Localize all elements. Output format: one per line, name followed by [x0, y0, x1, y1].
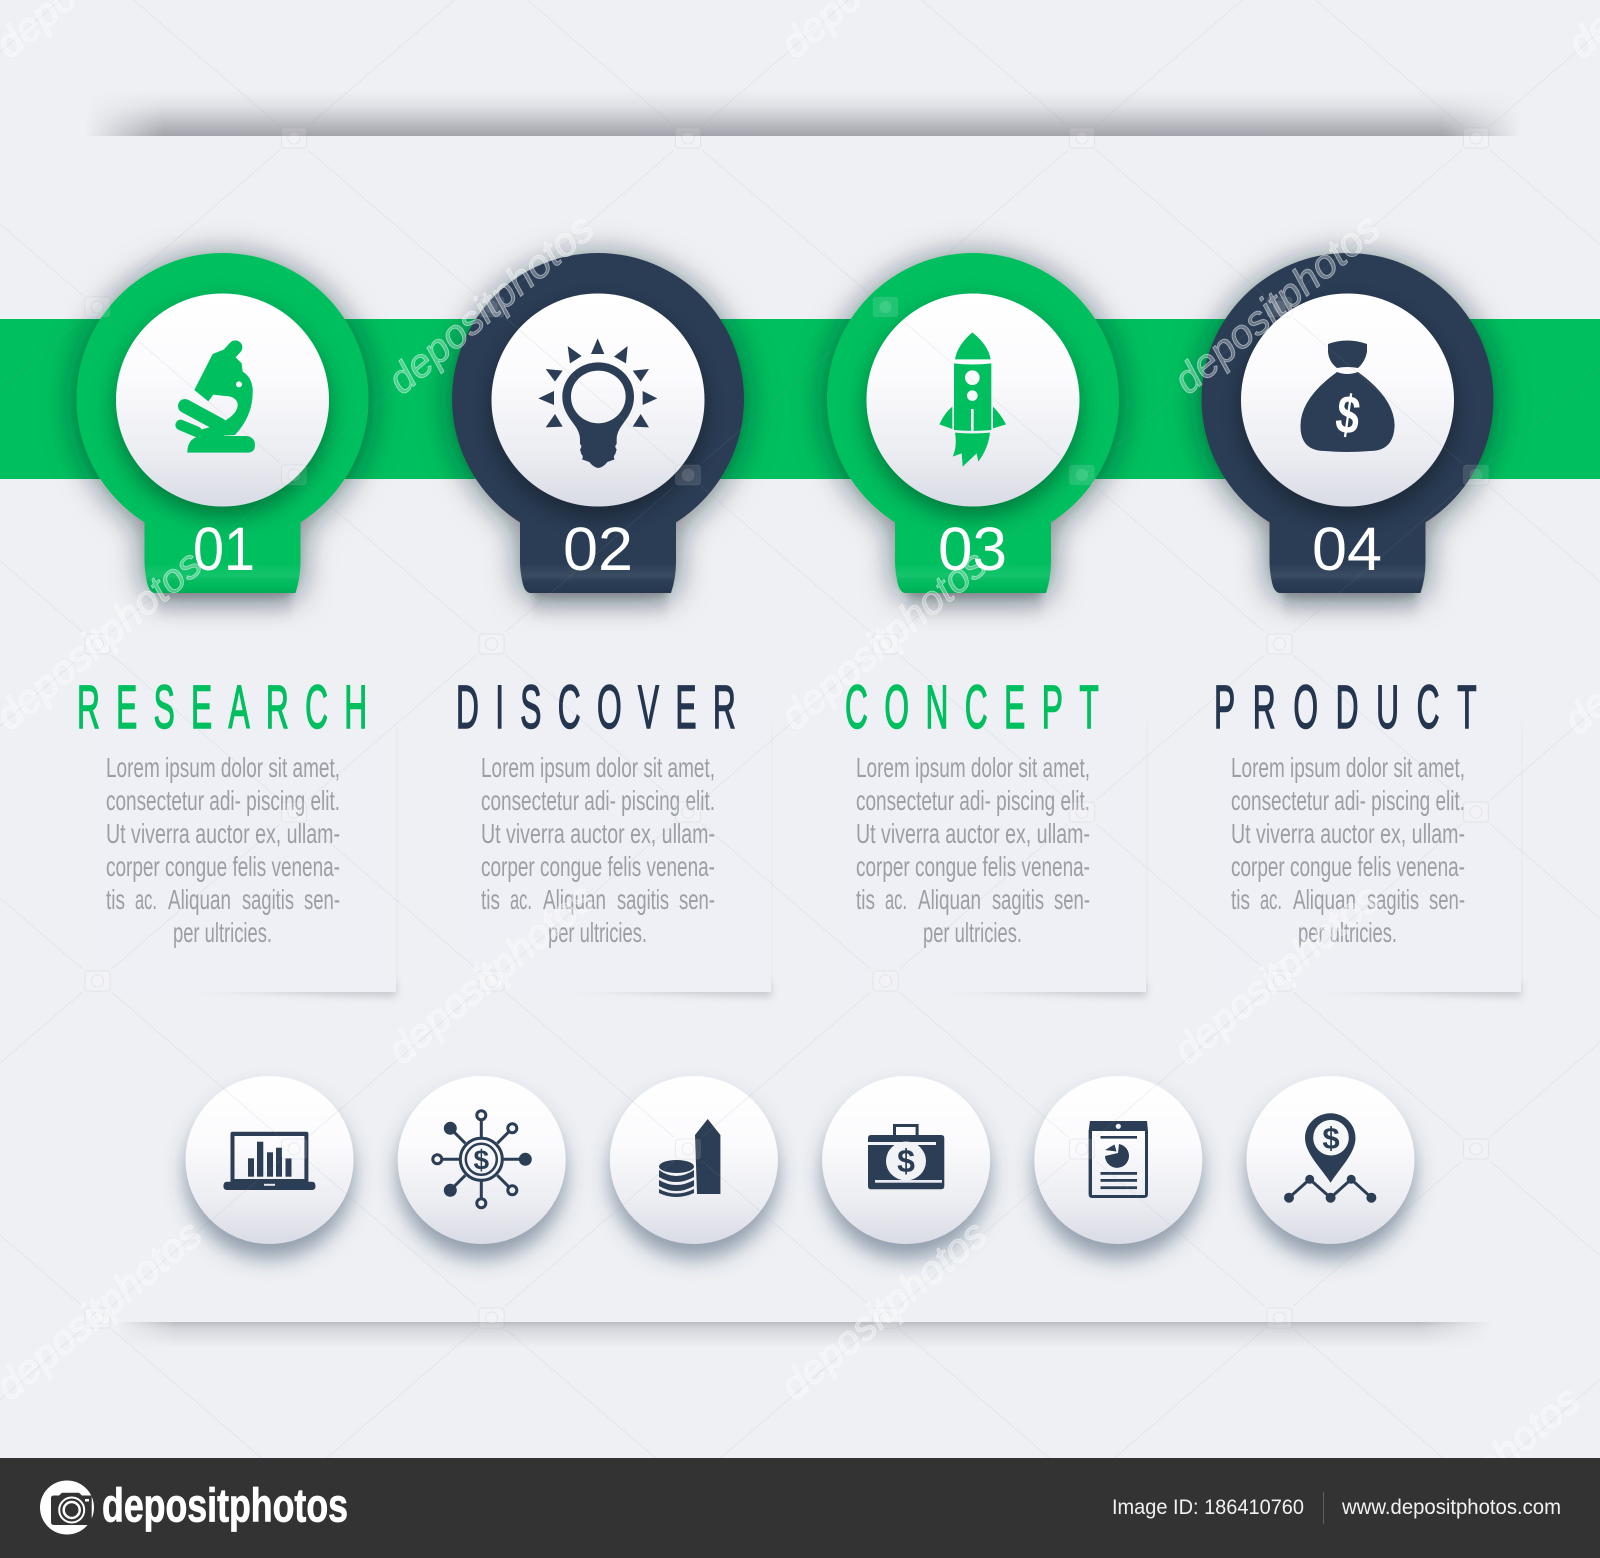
text block: concept: Aliquan [918, 884, 981, 915]
icon: coins and arrow bar [659, 1119, 720, 1197]
text block: product: corper congue felis venena- [1231, 851, 1465, 882]
icon: money briefcase [868, 1124, 944, 1189]
footer: image id: Image ID: 186410760 [1112, 1496, 1304, 1519]
small circle: briefcase [822, 1076, 990, 1244]
shadows below tabs [158, 586, 1417, 624]
text block: product: consectetur adi- piscing elit. [1231, 785, 1465, 816]
watermarks: depositphotos [1166, 206, 1388, 403]
text block: concept: ac. [885, 884, 907, 915]
icon: location pin with line graph: $ [1322, 1120, 1340, 1156]
text block: product: ac. [1260, 884, 1282, 915]
text block: research: consectetur adi- piscing elit. [106, 785, 340, 816]
step 02 badge [452, 253, 744, 593]
text block: research: Ut viverra auctor ex, ullam- [106, 818, 340, 849]
text block: concept: Ut viverra auctor ex, ullam- [856, 818, 1090, 849]
text block: concept: Lorem ipsum dolor sit amet, [856, 752, 1090, 783]
step 01 badge [76, 253, 368, 593]
icon: dollar network: $ [474, 1144, 490, 1175]
text block: discover: sen- [679, 884, 715, 915]
text block: discover: Aliquan [543, 884, 606, 915]
text block: research: ac. [135, 884, 157, 915]
text block: discover: Ut viverra auctor ex, ullam- [481, 818, 715, 849]
text block: concept: tis [856, 884, 875, 915]
top shadow strip [85, 88, 1522, 138]
text block: product: Ut viverra auctor ex, ullam- [1231, 818, 1465, 849]
paper panels behind the text [86, 690, 1522, 997]
small circle: report [1034, 1076, 1202, 1244]
text block: research: Lorem ipsum dolor sit amet, [106, 752, 340, 783]
logo: wordmark: depositphotos [102, 1479, 348, 1532]
number 01: 01 [193, 515, 255, 583]
text block: discover: corper congue felis venena- [481, 851, 715, 882]
watermarks: depositphotos [773, 1212, 995, 1409]
small circle: location [1246, 1076, 1414, 1244]
step 03 badge [827, 253, 1119, 593]
icon: microscope [181, 347, 255, 453]
icon: rocket [939, 332, 1006, 467]
text block: discover: consectetur adi- piscing elit. [481, 785, 715, 816]
text block: discover: per ultricies. [548, 917, 647, 948]
icon: light bulb [538, 338, 657, 468]
text block: concept: corper congue felis venena- [856, 851, 1090, 882]
heading: product: PRODUCT [1214, 674, 1477, 742]
icon: money bag: $ [1332, 384, 1364, 447]
text block: research: sen- [304, 884, 340, 915]
small circle: network [398, 1076, 566, 1244]
heading: concept: CONCEPT [845, 674, 1099, 742]
text block: discover: ac. [510, 884, 532, 915]
logo: depositphotos camera [40, 1480, 94, 1534]
text block: product: sen- [1429, 884, 1465, 915]
icon: money briefcase: $ [897, 1143, 915, 1179]
icon: location pin with line graph [1284, 1113, 1376, 1203]
text block: concept: sagitis [992, 884, 1044, 915]
watermarks: depositphotos [773, 542, 995, 739]
text block: product [1231, 752, 1465, 948]
footer: divider [1323, 1492, 1324, 1524]
heading: discover: DISCOVER [456, 674, 736, 742]
text block: research: tis [106, 884, 125, 915]
small circle: laptop [186, 1076, 354, 1244]
text block: product: per ultricies. [1298, 917, 1397, 948]
heading: research: RESEARCH [77, 674, 367, 742]
text block: concept: sen- [1054, 884, 1090, 915]
text block: concept: per ultricies. [923, 917, 1022, 948]
text block: discover: sagitis [617, 884, 669, 915]
watermarks: depositphotos [380, 876, 602, 1073]
text block: research: Aliquan [168, 884, 231, 915]
footer bar [0, 1458, 1600, 1558]
text block: research: per ultricies. [173, 917, 272, 948]
text block: product: Lorem ipsum dolor sit amet, [1231, 752, 1465, 783]
step 04 badge [1202, 253, 1494, 593]
text block: product: tis [1231, 884, 1250, 915]
text block: product: Aliquan [1293, 884, 1356, 915]
text block: research: corper congue felis venena- [106, 851, 340, 882]
small circle: coins and bar [610, 1076, 778, 1244]
number 02: 02 [563, 515, 633, 583]
number 04: 04 [1312, 515, 1382, 583]
text block: product: sagitis [1367, 884, 1419, 915]
green horizontal band [0, 319, 1600, 479]
icon: dollar network [433, 1111, 532, 1208]
icon: laptop chart [223, 1132, 316, 1190]
icon: report with pie chart [1089, 1121, 1148, 1198]
text block: research [106, 752, 340, 948]
text block: concept: consectetur adi- piscing elit. [856, 785, 1090, 816]
text block: discover: Lorem ipsum dolor sit amet, [481, 752, 715, 783]
watermarks: depositphotos [1166, 876, 1388, 1073]
watermarks: depositphotos [380, 206, 602, 403]
bottom shadow strip [116, 1320, 1492, 1350]
icon: money bag [1300, 340, 1395, 452]
text block: research: sagitis [242, 884, 294, 915]
number 03: 03 [938, 515, 1007, 583]
text block: discover [481, 752, 715, 948]
footer: url: www.depositphotos.com [1341, 1496, 1561, 1519]
text block: discover: tis [481, 884, 500, 915]
text block: concept [856, 752, 1090, 948]
